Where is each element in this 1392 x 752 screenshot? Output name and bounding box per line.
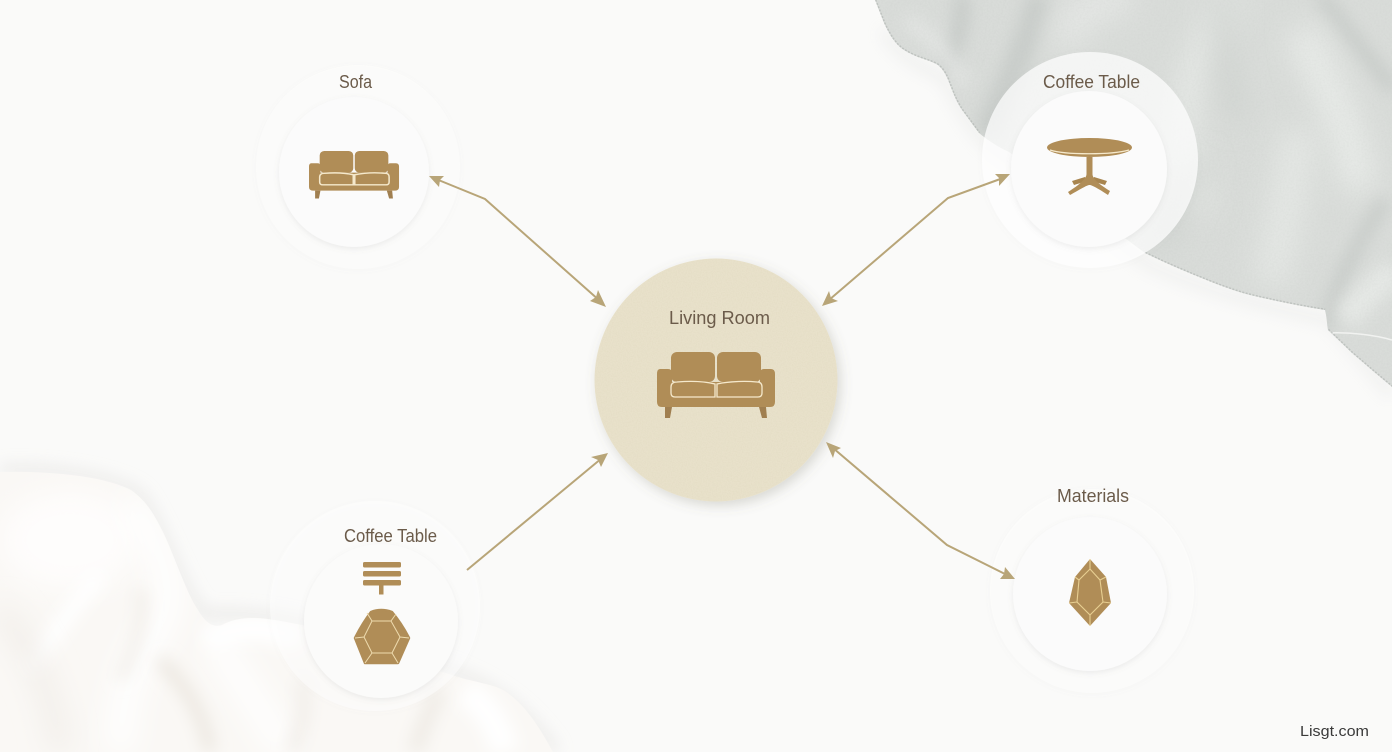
- inner disc: [279, 97, 429, 247]
- icon: round table: [1047, 138, 1132, 195]
- connector: sofa to living room: [429, 176, 606, 307]
- white fabric: [0, 470, 560, 752]
- outer ring: [256, 65, 460, 269]
- outer ring: [270, 501, 480, 711]
- label: Coffee Table: [344, 526, 437, 546]
- beige disc: [594, 258, 838, 502]
- inner disc: [1013, 517, 1167, 671]
- icon: stacked bars: [363, 562, 401, 594]
- icon: sofa: [309, 151, 399, 199]
- connector: materials to living room: [826, 442, 1015, 579]
- outer ring: [990, 489, 1194, 693]
- disc texture: [595, 258, 837, 502]
- connector: coffee table top right to living room: [822, 174, 1010, 306]
- inner disc: [304, 544, 458, 698]
- node: coffee table bottom left: [270, 501, 480, 711]
- outer ring: [982, 52, 1198, 268]
- label: Sofa: [339, 72, 373, 92]
- node: materials: [990, 486, 1194, 693]
- node: coffee table top right: [982, 52, 1198, 268]
- node: sofa: [256, 65, 460, 269]
- icon: crystal: [1069, 559, 1111, 626]
- node: living room centre: [594, 258, 838, 502]
- icon: faceted gem: [355, 610, 409, 663]
- watermark: Lisgt.com: [1300, 723, 1369, 740]
- inner disc: [1011, 91, 1167, 247]
- connector: coffee table bottom left to living room: [467, 453, 608, 570]
- label: Materials: [1057, 486, 1129, 506]
- grey fabric: [860, 0, 1392, 400]
- label: Living Room: [669, 307, 770, 328]
- label: Coffee Table: [1043, 72, 1140, 92]
- icon: large sofa: [657, 352, 775, 418]
